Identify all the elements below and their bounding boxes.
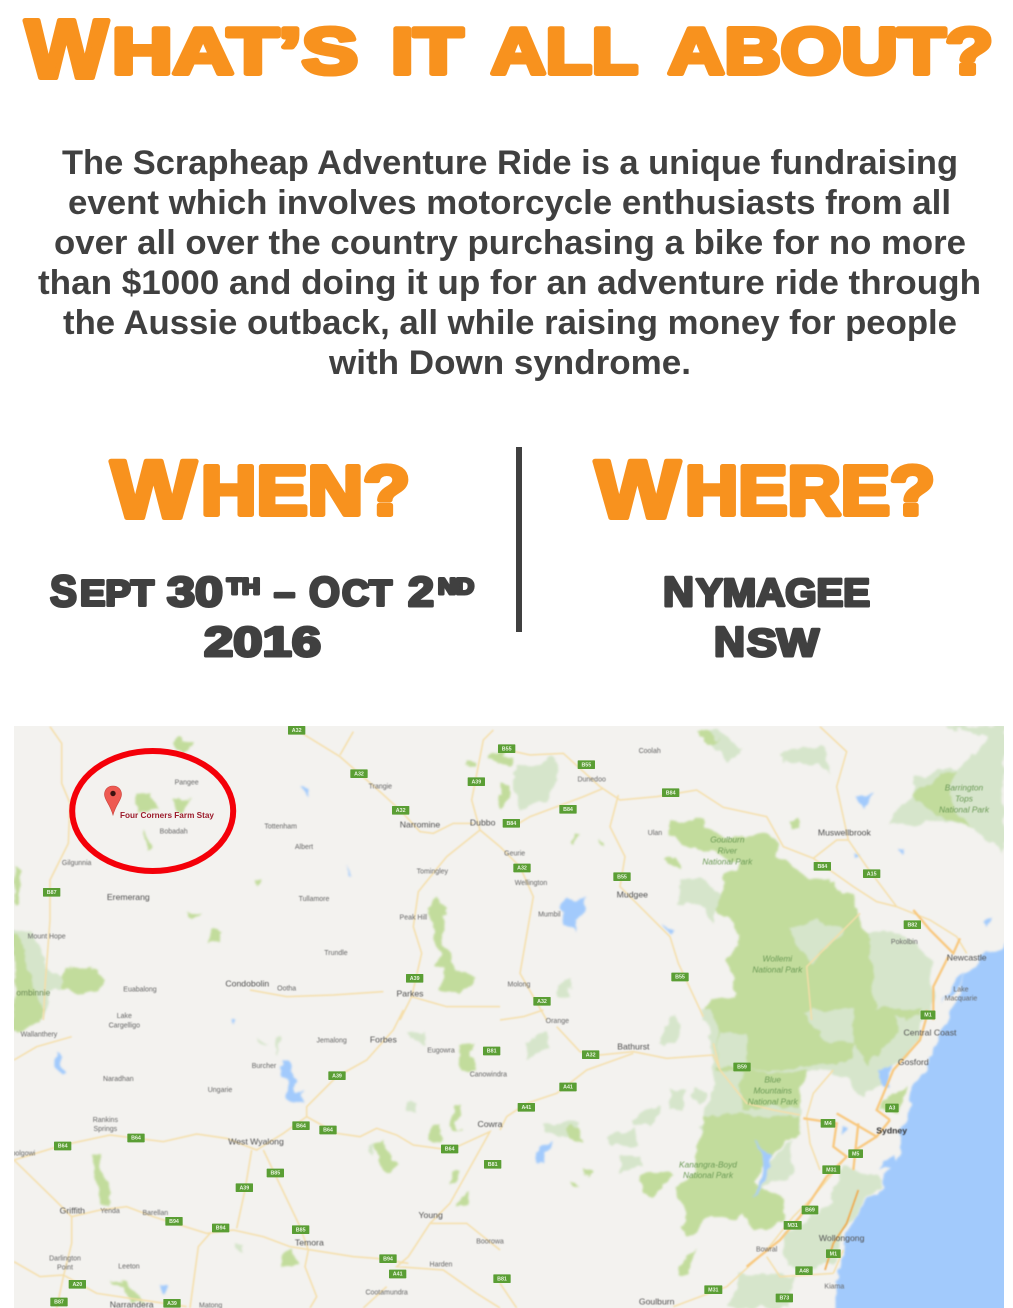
map: place labels: Pokolbin [891, 939, 918, 946]
heading: where [595, 444, 935, 536]
map: place labels: Lake [117, 1013, 132, 1020]
map: road shields: M31 [787, 1223, 798, 1229]
map: place labels: Young [419, 1210, 443, 1220]
map: road shields: B84 [506, 821, 516, 827]
map: road shields: A32 [537, 999, 547, 1005]
title: ALL [491, 14, 638, 88]
map: place labels: Eugowra [427, 1048, 455, 1055]
map: place labels: Trundle [324, 950, 348, 957]
intro text block [38, 144, 981, 382]
map: place labels: Griffith [60, 1205, 85, 1215]
when: dates [50, 567, 474, 665]
map: road shields: B55 [502, 746, 512, 752]
when: dates: EPT [80, 572, 154, 614]
map: place labels: Bobadah [160, 829, 188, 836]
map: place labels: Dunedoo [577, 777, 606, 784]
intro text block: over all over the country purchasing a bike for no more [54, 224, 966, 262]
when: dates: 30 [167, 568, 223, 615]
when: dates: S [50, 567, 77, 616]
map: place labels: Tullamore [299, 896, 330, 903]
map: road shields: A48 [799, 1268, 809, 1274]
map: place labels: Cargelligo [109, 1022, 140, 1029]
map: road shields: A15 [867, 871, 877, 877]
where: location: N [714, 618, 745, 665]
map: place labels: Forbes [370, 1034, 397, 1044]
map: place labels: Newcastle [947, 953, 987, 963]
map: place labels: Molong [508, 982, 531, 989]
map: road shields: A41 [521, 1105, 531, 1111]
map: road shields: B94 [216, 1226, 226, 1232]
map: land and water shapes [14, 727, 1013, 1308]
map: location label: Four Corners Farm Stay [120, 810, 214, 820]
map: road shields: B84 [666, 790, 676, 796]
map: place labels: Lake [953, 987, 969, 994]
map: road shields: A39 [239, 1185, 249, 1191]
map: place labels: Euabalong [123, 986, 157, 993]
map: place labels: Wellington [515, 880, 547, 887]
map: place labels: National Park [752, 965, 803, 975]
where: location [663, 568, 870, 665]
map: place labels: Naradhan [103, 1076, 134, 1083]
map: road shields: A32 [517, 866, 527, 872]
map: place labels: Pangee [175, 780, 199, 787]
map: road shields: A41 [393, 1272, 403, 1278]
intro text block: the Aussie outback, all while raising money for people [63, 304, 957, 342]
map: road shields: B84 [817, 864, 827, 870]
map: place labels: Barellan [143, 1210, 168, 1217]
map: road shields: B87 [47, 890, 57, 896]
map: road shields: B81 [487, 1049, 497, 1055]
intro text block: with Down syndrome. [328, 344, 691, 382]
map: place labels: Macquarie [945, 996, 977, 1003]
map: location pin [104, 786, 122, 815]
map: place labels: Wallanthery [21, 1031, 58, 1038]
map: road shields: B87 [54, 1300, 64, 1306]
map: place labels: Orange [546, 1018, 569, 1025]
map: place labels: Ootha [277, 985, 296, 992]
map: road shields: A20 [72, 1282, 82, 1288]
map: place labels [11, 748, 990, 1308]
map: place labels: Gosford [898, 1057, 929, 1067]
where: location: N [663, 568, 694, 615]
where: location: YMAGEE [696, 572, 870, 615]
map: place labels: Wollongong [819, 1233, 865, 1243]
map: road shields: B73 [779, 1296, 789, 1302]
title: HAT’S [112, 14, 358, 88]
map: road shields: B81 [488, 1162, 498, 1168]
map: place labels: Muswellbrook [818, 828, 871, 838]
map: road shields: M31 [826, 1167, 837, 1173]
when: dates: ND [438, 574, 474, 599]
map: place labels: Tomingley [417, 868, 449, 875]
map: road shields: B81 [497, 1276, 507, 1282]
heading: when: W [111, 444, 197, 536]
intro text block: event which involves motorcycle enthusiasts from all [68, 184, 951, 222]
map: place labels: Barrington [945, 783, 984, 793]
map: road shields: M1 [924, 1013, 932, 1019]
map: place labels: Condobolin [225, 979, 269, 989]
map: road shields: A32 [396, 808, 406, 814]
map: road shields: A3 [889, 1106, 895, 1112]
map: road shields: B55 [617, 874, 627, 880]
map: place labels: ombinnie [16, 987, 51, 997]
map: road shields: B94 [383, 1256, 393, 1262]
where: location: SW [747, 622, 819, 665]
heading: where: HERE? [685, 452, 935, 530]
map: place labels: Albert [295, 844, 313, 851]
when: dates: CT [342, 572, 392, 614]
map: road shields: M31 [708, 1287, 719, 1293]
map: place labels: Sydney [876, 1126, 907, 1136]
map: place labels: Ungarie [208, 1087, 232, 1094]
map [11, 726, 1013, 1308]
map: place labels: River [718, 845, 738, 855]
map: place labels: Jemalong [317, 1038, 347, 1045]
map: place labels: Mudgee [617, 889, 648, 899]
map: place labels: Ulan [648, 830, 662, 837]
map: road shields: M1 [830, 1251, 837, 1257]
when: dates: 2 [408, 568, 434, 615]
map: place labels: Point [57, 1264, 73, 1271]
map: road shields: B64 [445, 1147, 455, 1153]
map: place labels: Canowindra [470, 1072, 507, 1079]
title: W [25, 2, 109, 96]
map: place labels: Springs [93, 1126, 118, 1133]
map: place labels: Darlington [49, 1256, 81, 1263]
map: place labels: National Park [702, 856, 753, 866]
map: place labels: Mountains [753, 1085, 792, 1095]
map: place labels: Peak Hill [400, 914, 428, 921]
map: place labels: Geurie [504, 851, 525, 858]
when: dates: 2016 [204, 618, 321, 665]
map: road shields: M5 [852, 1151, 859, 1157]
map: place labels: Rankins [93, 1117, 118, 1124]
map: place labels: Harden [430, 1261, 453, 1268]
map: roads [14, 727, 967, 1308]
title: IT [391, 14, 463, 88]
map: place labels: Tottenham [264, 823, 297, 830]
map: road shields: B55 [675, 975, 685, 981]
map: place labels: Mount Hope [28, 933, 66, 940]
map: place labels: Mumbil [538, 912, 561, 919]
map: road shields: B64 [131, 1136, 141, 1142]
map: place labels: West Wyalong [228, 1137, 284, 1147]
map: place labels: Kanangra-Boyd [679, 1159, 737, 1169]
map: road shields: A39 [167, 1301, 177, 1307]
divider [516, 447, 522, 632]
map: place labels: National Park [748, 1096, 798, 1106]
map: place labels: Bathurst [617, 1042, 650, 1052]
map: road shields: A39 [471, 779, 481, 785]
map: road shields: B69 [805, 1208, 815, 1214]
map: place labels: Goulburn [710, 834, 745, 844]
title [25, 2, 993, 96]
map: place labels: Tops [955, 794, 973, 804]
map: place labels: Dubbo [470, 817, 496, 827]
map: place labels: Bowral [756, 1247, 778, 1254]
map: place labels: Yenda [100, 1208, 120, 1215]
map: place labels: Parkes [397, 988, 424, 998]
map: road shields: A32 [586, 1052, 596, 1058]
intro text block: than $1000 and doing it up for an adventure ride through [38, 264, 981, 302]
map: place labels: Goulburn [639, 1297, 675, 1307]
map: place labels: National Park [939, 804, 990, 814]
map: road shields: A41 [563, 1085, 573, 1091]
heading: when [111, 444, 410, 536]
map: place labels: Temora [295, 1238, 324, 1248]
map: road shields: A32 [292, 728, 302, 734]
when: dates: TH [227, 574, 260, 599]
map: road shields: B94 [169, 1219, 179, 1225]
map: place labels: Gilgunnia [62, 860, 92, 867]
map: road shields: A39 [332, 1073, 342, 1079]
heading: when: HEN? [201, 452, 410, 530]
map: place labels: Central Coast [904, 1028, 957, 1038]
map: road shields: B85 [296, 1227, 306, 1233]
map: road shields: B82 [907, 922, 917, 928]
heading: where: W [595, 444, 681, 536]
map: road shields: B64 [58, 1144, 68, 1150]
map: place labels: Trangie [369, 783, 392, 790]
map: place labels: Eremerang [107, 892, 150, 902]
map: road shields [43, 726, 935, 1308]
map: place labels: Wollemi [763, 954, 793, 964]
intro text block: The Scrapheap Adventure Ride is a unique fundraising [62, 144, 958, 182]
map: road shields: B55 [581, 762, 591, 768]
map: road shields: B85 [270, 1171, 280, 1177]
map: place labels: National Park [683, 1170, 734, 1180]
map: red circle callout [72, 751, 233, 871]
title: ABOUT? [668, 14, 993, 88]
map: road shields: M1 [924, 1013, 932, 1019]
map: place labels: Coolah [639, 748, 661, 755]
when: dates: O [309, 568, 340, 615]
map: place labels: Cootamundra [365, 1290, 408, 1297]
map: road shields: A32 [354, 771, 364, 777]
map: place labels: Burcher [252, 1063, 277, 1070]
map: place labels: Cowra [477, 1119, 503, 1129]
map: road shields: M4 [824, 1121, 832, 1127]
map: road shields: A39 [410, 976, 420, 982]
map: road shields: B84 [563, 807, 573, 813]
map: road shields: B59 [737, 1065, 747, 1071]
when: dates: – [274, 572, 295, 613]
map: place labels: Blue [764, 1075, 781, 1085]
map: place labels: Boorowa [476, 1238, 504, 1245]
map: road shields: B64 [296, 1123, 306, 1129]
map: place labels: Kiama [824, 1284, 844, 1291]
map: road shields: B64 [323, 1128, 333, 1134]
map: place labels: oolgowi [11, 1151, 36, 1158]
map: place labels: Leeton [118, 1264, 140, 1271]
map: place labels: Narromine [400, 820, 440, 830]
